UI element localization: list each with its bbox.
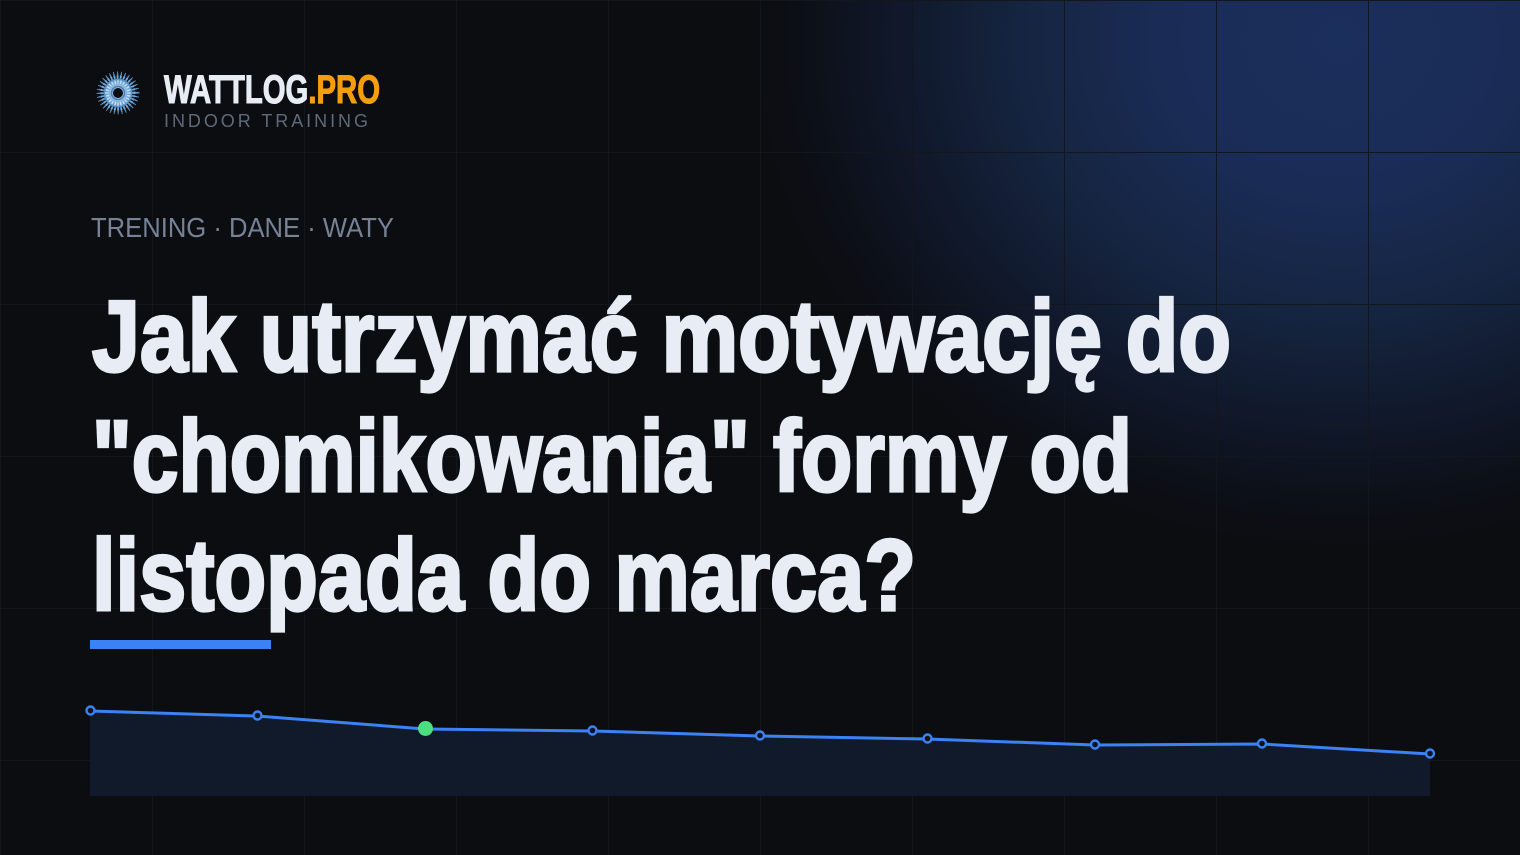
title line 1: Jak utrzymać motywację do [92, 281, 1231, 393]
brand name: WATTLOG.PRO [164, 68, 380, 112]
line chart [86, 706, 1434, 796]
chart line [90, 711, 1430, 754]
brand tagline: INDOOR TRAINING [164, 111, 368, 131]
chart points [86, 706, 1434, 758]
title line 3: listopada do marca? [92, 520, 916, 632]
logo [98, 68, 380, 131]
chart area [90, 711, 1430, 796]
title [92, 281, 1231, 632]
icon: cassette gear [98, 72, 138, 114]
title line 2: "chomikowania" formy od [92, 401, 1132, 513]
highlighted point [418, 721, 433, 736]
title accent bar [90, 640, 271, 649]
eyebrow: TRENING · DANE · WATY [91, 212, 394, 243]
